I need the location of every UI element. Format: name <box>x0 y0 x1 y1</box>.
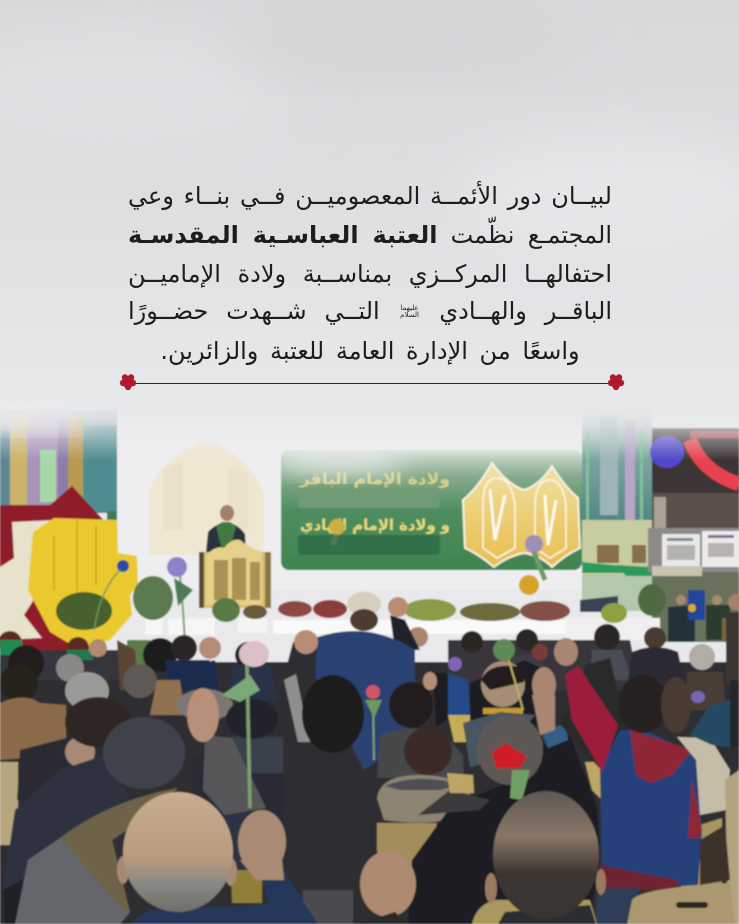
mid row man behind rose <box>463 639 548 767</box>
backdrop wall behind the stage <box>0 400 739 670</box>
row of plants and planters <box>133 576 666 640</box>
centre chair <box>377 823 437 890</box>
left chair <box>0 762 18 845</box>
roses raised above the stage <box>167 519 545 690</box>
audience base <box>0 662 739 924</box>
flower hamsa display <box>0 486 138 665</box>
right mosaic pillar and shopfront <box>582 404 660 611</box>
bald man in the foreground <box>117 792 318 924</box>
right notice boards <box>648 528 739 572</box>
divider with rosettes <box>120 374 624 390</box>
chairs around the boy in red <box>447 762 722 890</box>
man with red rose and black jacket <box>408 667 600 924</box>
patterned sweater person <box>690 691 730 747</box>
front chair <box>627 883 735 924</box>
stage arch panel <box>149 440 264 555</box>
red rose <box>492 743 530 800</box>
small rose <box>365 685 382 760</box>
ornate golden podium <box>199 540 271 608</box>
green banner: و ولادة الإمام الهادي <box>300 516 450 535</box>
fade of photo into background <box>0 398 739 460</box>
right background people and greenery <box>580 566 739 642</box>
green banner <box>281 450 582 570</box>
golden banner medallions <box>463 463 580 567</box>
right building with festive lights <box>650 428 739 533</box>
main Arabic text block: المجتمـع نظّمت العتبة العباسـية المقدسـة <box>128 221 612 249</box>
boy in black hoodie <box>283 630 372 924</box>
right edge camera and chair <box>700 680 739 924</box>
seated boys near centre <box>377 657 473 823</box>
soft white mist over the stage top <box>0 410 405 474</box>
man in dark cap <box>17 697 131 800</box>
far audience row right <box>388 594 739 710</box>
main Arabic text block: عليهما السلام <box>400 304 419 319</box>
person in patterned jacket behind the arm <box>193 699 285 815</box>
tan jacket man <box>0 664 66 760</box>
beige jacket man <box>661 677 730 815</box>
rose held up <box>222 641 269 808</box>
chair behind bald man <box>231 870 262 903</box>
boy in red and blue sweatshirt <box>554 638 702 924</box>
raised arm with grey sleeve <box>187 688 266 873</box>
main Arabic text block: احتفالهــا المركــزي بمناســبة ولادة الإماميــن <box>128 260 612 288</box>
black-clad person behind boy in red <box>556 658 640 780</box>
main Arabic text block: واسعًا من الإدارة العامة للعتبة والزائرين. <box>160 337 580 365</box>
hand in bottom foreground <box>357 851 416 924</box>
speaker at podium <box>206 505 246 552</box>
man in front with dark hair <box>485 791 606 924</box>
man in navy jacket and beanie <box>3 717 185 924</box>
main Arabic text block <box>128 180 612 365</box>
green banner: ولادة الإمام الباقر <box>299 470 450 488</box>
left tiled pillars <box>0 410 117 524</box>
main Arabic text block: الباقــر والهــادي التــي شــهدت حضــورًا <box>128 297 612 325</box>
far audience row left <box>0 631 278 721</box>
front chair centre <box>472 900 597 924</box>
man in blue robe with white cap <box>310 592 415 770</box>
main Arabic text block: لبيــان دور الأئمــة المعصوميــن فــي بنــاء وعي <box>128 182 612 210</box>
